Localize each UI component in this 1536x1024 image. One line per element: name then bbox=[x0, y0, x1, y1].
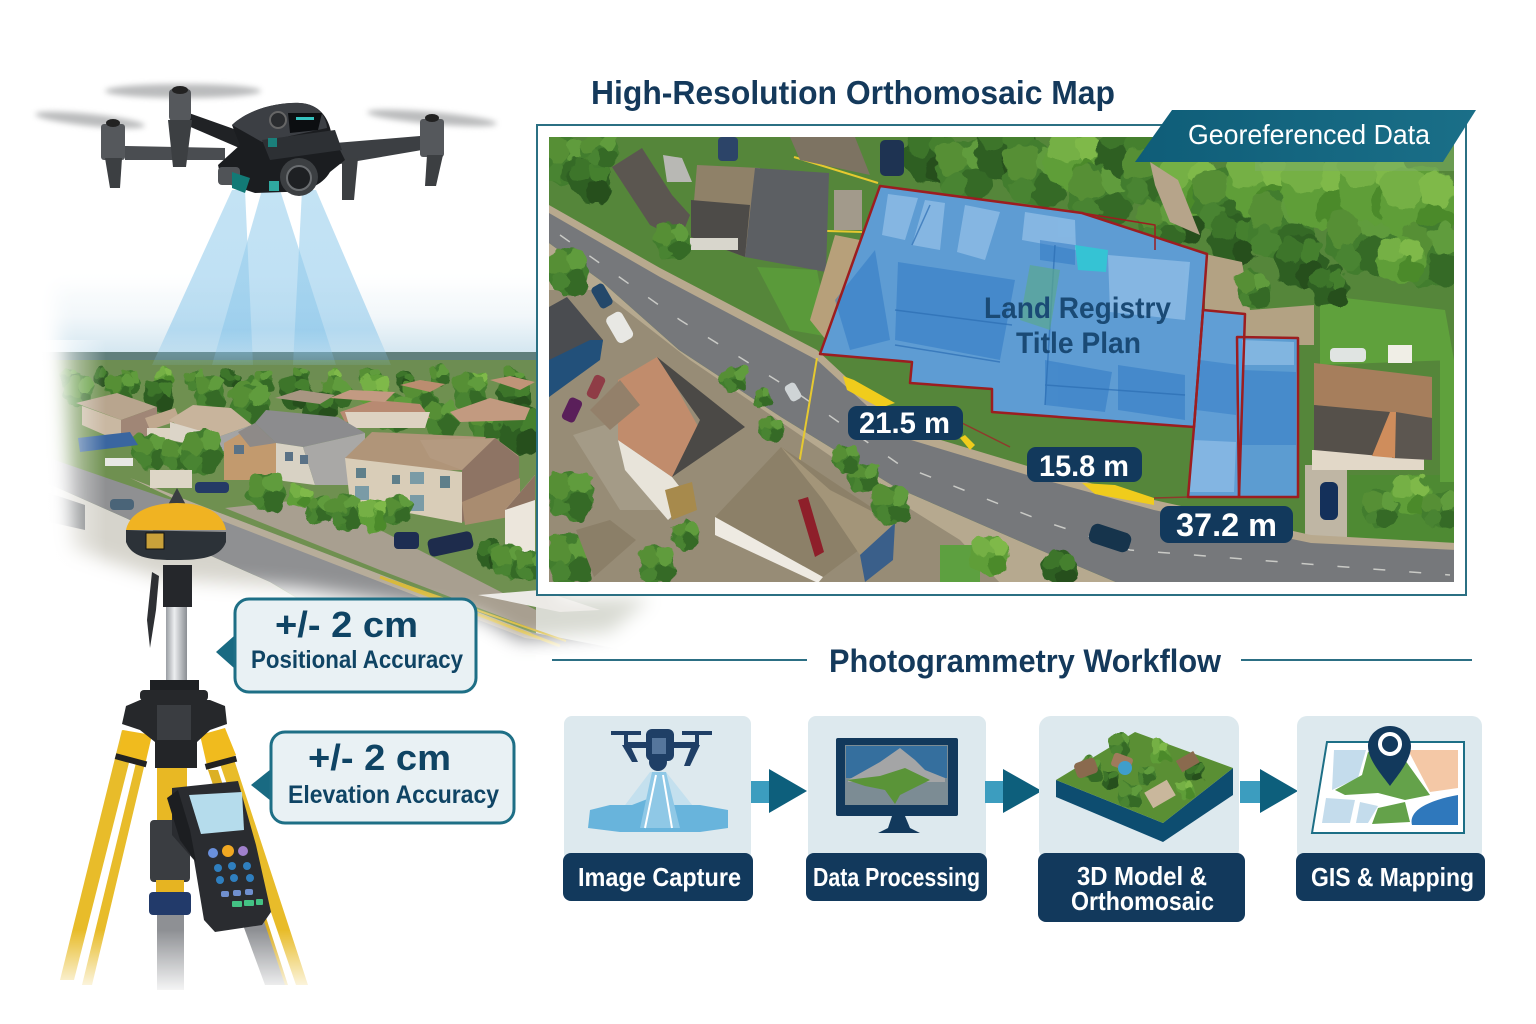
callout: elevation accuracy: Elevation Accuracy bbox=[288, 781, 499, 809]
step: 3D model and orthomosaic: Orthomosaic bbox=[1071, 886, 1214, 916]
icon: 3D terrain block bbox=[1056, 732, 1233, 842]
house left edge bbox=[549, 297, 603, 397]
workflow heading: Photogrammetry Workflow bbox=[829, 643, 1221, 679]
land registry title plan overlay bbox=[820, 186, 1298, 497]
tree canopy top right bbox=[549, 137, 1454, 290]
GNSS receiver bbox=[126, 488, 226, 560]
land registry label: Title Plan bbox=[1016, 327, 1141, 360]
callout: elevation accuracy: +/- 2 cm bbox=[308, 737, 451, 778]
callout: positional accuracy bbox=[216, 599, 476, 692]
icon: map with pin bbox=[1312, 726, 1464, 833]
step: 3D model and orthomosaic: 3D Model & bbox=[1077, 861, 1207, 891]
large right house bbox=[345, 432, 486, 472]
aerial map image bbox=[541, 120, 1462, 586]
aerial neighbourhood scene bbox=[52, 299, 646, 652]
arrow bbox=[751, 769, 807, 813]
car bbox=[1088, 524, 1132, 552]
arms bbox=[125, 146, 225, 160]
tag: georeferenced data bbox=[1135, 110, 1476, 162]
field controller bbox=[167, 781, 271, 932]
step: data processing: Data Processing bbox=[813, 862, 980, 892]
driveway yellow markings bbox=[843, 376, 1154, 505]
step: GIS and mapping: GIS & Mapping bbox=[1311, 862, 1474, 892]
camera beams bbox=[152, 190, 391, 365]
front boundary bbox=[962, 423, 1188, 498]
callout: positional accuracy: Positional Accuracy bbox=[251, 646, 463, 674]
back-left houses bbox=[76, 393, 157, 420]
arrow bbox=[985, 769, 1042, 813]
propellers bbox=[35, 84, 497, 132]
callout: positional accuracy: +/- 2 cm bbox=[275, 604, 418, 645]
icon: monitor bbox=[836, 738, 958, 833]
house bottom bbox=[716, 447, 872, 577]
icon: drone capture bbox=[588, 729, 728, 832]
tripod legs bbox=[60, 730, 136, 980]
measurement: 21.5 m: 21.5 m bbox=[859, 407, 950, 440]
measurement: 15.8 m: 15.8 m bbox=[1039, 450, 1129, 483]
terracotta house bbox=[573, 424, 659, 510]
drone bbox=[35, 84, 497, 200]
fuselage bbox=[218, 103, 345, 193]
measurement: 37.2 m: 37.2 m bbox=[1176, 507, 1277, 543]
road bbox=[62, 463, 592, 650]
step: GIS and mapping bbox=[1296, 716, 1485, 901]
tag: georeferenced data: Georeferenced Data bbox=[1188, 119, 1430, 150]
title: High-Resolution Orthomosaic Map bbox=[591, 74, 1115, 111]
clamp bbox=[150, 820, 190, 882]
lower pale ground bbox=[59, 489, 296, 598]
grey house bbox=[255, 410, 365, 447]
step: data processing bbox=[806, 716, 987, 901]
callout: elevation accuracy bbox=[251, 732, 514, 823]
step: image capture: Image Capture bbox=[578, 862, 741, 892]
right house bbox=[1312, 450, 1424, 470]
step: 3D model and orthomosaic bbox=[1038, 716, 1245, 922]
land registry label bbox=[984, 292, 1171, 360]
motors and legs bbox=[101, 86, 444, 200]
lawn and driveway bbox=[1320, 295, 1454, 365]
houses top left bbox=[546, 137, 904, 345]
land registry label: Land Registry bbox=[984, 292, 1171, 325]
head bbox=[150, 680, 199, 694]
bushes and cars bbox=[246, 474, 544, 580]
pole bbox=[166, 600, 187, 685]
sidewalks and road bbox=[549, 205, 1456, 560]
survey tripod with GNSS receiver bbox=[60, 488, 308, 990]
building shapes under title plan bbox=[820, 186, 1207, 427]
step: image capture bbox=[563, 716, 753, 901]
panel: orthomosaic map bbox=[537, 120, 1466, 595]
arrow bbox=[1240, 769, 1298, 813]
